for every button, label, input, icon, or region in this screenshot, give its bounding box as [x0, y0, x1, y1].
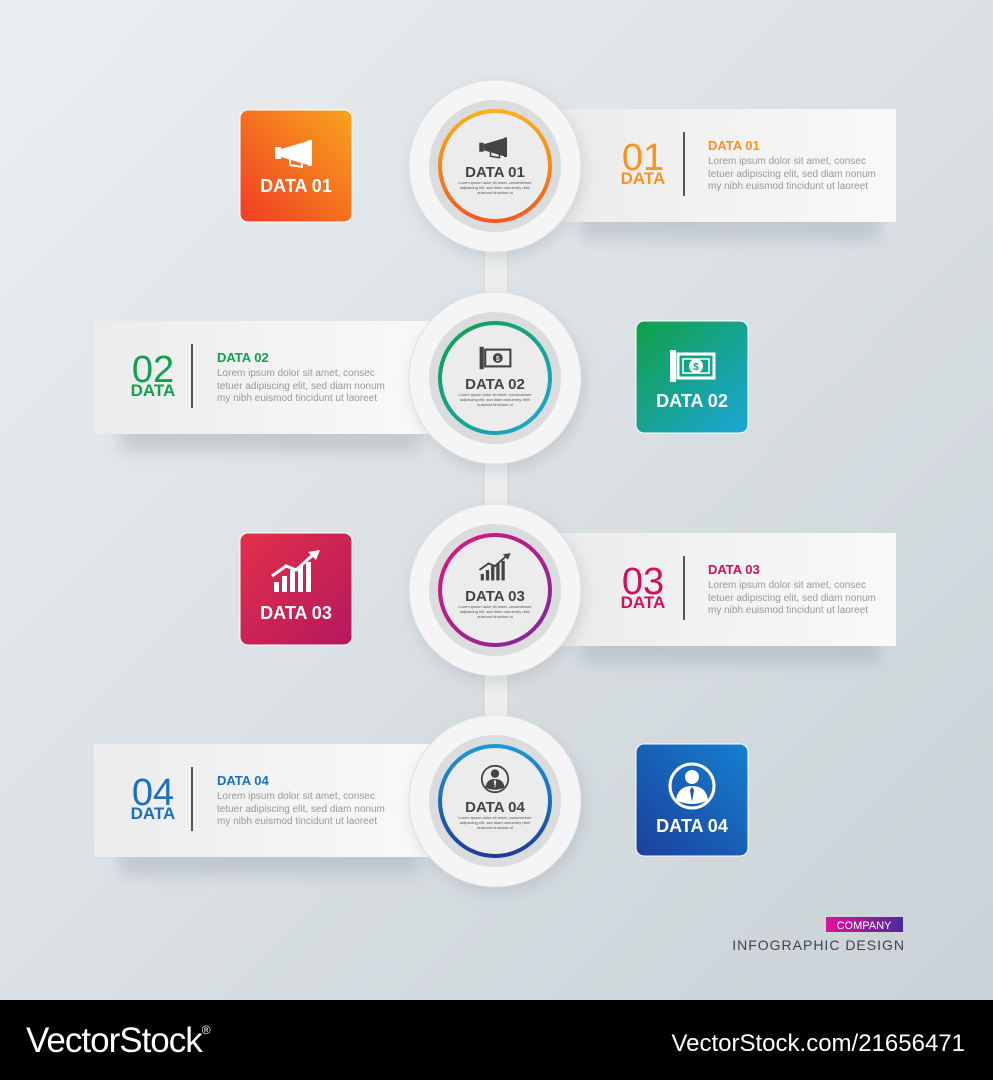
banner 4: tetuer adipiscing elit, sed diam nonum: [217, 804, 385, 815]
square 4: [636, 744, 748, 856]
circle 4: adipiscing elit, sed diam nonummy nibh: [460, 820, 530, 825]
circle 2: $: [496, 356, 500, 363]
banner 3: [560, 533, 896, 664]
square 3: DATA 03: [260, 603, 332, 623]
company label: COMPANY: [837, 920, 892, 932]
row 3: [240, 504, 896, 682]
circle 2: DATA 02: [465, 376, 525, 393]
circle 4: [409, 715, 584, 893]
timeline stem: [484, 166, 508, 806]
banner 3: tetuer adipiscing elit, sed diam nonum: [708, 593, 876, 604]
banner 1: [560, 109, 896, 240]
banner 4: [94, 744, 430, 875]
circle 4: euismod tincidunt ut: [477, 825, 514, 830]
banner 3: DATA: [621, 593, 665, 612]
square 3: [240, 533, 352, 645]
circle 1: [409, 80, 584, 258]
circle 3: [409, 504, 584, 682]
footer watermark bar: ®: [202, 1023, 211, 1037]
banner 2: Lorem ipsum dolor sit amet, consec: [217, 368, 375, 379]
circle 2: [409, 292, 584, 470]
banner 2: DATA: [131, 381, 175, 400]
banner 2: [94, 321, 430, 452]
banner 1: DATA 01: [708, 138, 760, 153]
square 4: DATA 04: [656, 816, 728, 836]
banner 1: 01: [622, 137, 664, 179]
banner 2: my nibh euismod tincidunt ut laoreet: [217, 393, 377, 404]
row 1: [240, 80, 896, 258]
row 2: [94, 292, 748, 470]
square 2: [636, 321, 748, 433]
banner 3: my nibh euismod tincidunt ut laoreet: [708, 605, 868, 616]
footer watermark bar: VectorStock.com/21656471: [671, 1030, 965, 1057]
square 1: DATA 01: [260, 176, 332, 196]
circle 3: DATA 03: [465, 588, 525, 605]
circle 2: Lorem ipsum dolor sit amet, consectetuer: [458, 392, 532, 397]
circle 2: euismod tincidunt ut: [477, 402, 514, 407]
circle 3: euismod tincidunt ut: [477, 614, 514, 619]
banner 1: tetuer adipiscing elit, sed diam nonum: [708, 169, 876, 180]
banner 2: tetuer adipiscing elit, sed diam nonum: [217, 381, 385, 392]
square 2: DATA 02: [656, 391, 728, 411]
banner 1: my nibh euismod tincidunt ut laoreet: [708, 181, 868, 192]
footer watermark bar: VectorStock: [26, 1021, 202, 1060]
banner 4: Lorem ipsum dolor sit amet, consec: [217, 791, 375, 802]
banner 3: DATA 03: [708, 562, 760, 577]
banner 4: 04: [132, 772, 174, 814]
banner 2: DATA 02: [217, 350, 269, 365]
banner 4: DATA 04: [217, 773, 270, 788]
banner 3: 03: [622, 561, 664, 603]
circle 4: DATA 04: [465, 799, 526, 816]
circle 2: adipiscing elit, sed diam nonummy nibh: [460, 397, 530, 402]
circle 1: Lorem ipsum dolor sit amet, consectetuer: [458, 180, 532, 185]
circle 4: Lorem ipsum dolor sit amet, consectetuer: [458, 815, 532, 820]
row 4: [94, 715, 748, 893]
square 1: [240, 110, 352, 222]
banner 3: Lorem ipsum dolor sit amet, consec: [708, 580, 866, 591]
circle 3: Lorem ipsum dolor sit amet, consectetuer: [458, 604, 532, 609]
company label: [732, 917, 905, 953]
circle 3: adipiscing elit, sed diam nonummy nibh: [460, 609, 530, 614]
banner 1: Lorem ipsum dolor sit amet, consec: [708, 156, 866, 167]
circle 1: adipiscing elit, sed diam nonummy nibh: [460, 185, 530, 190]
circle 1: euismod tincidunt ut: [477, 190, 514, 195]
banner 4: my nibh euismod tincidunt ut laoreet: [217, 816, 377, 827]
square 2: $: [693, 362, 699, 373]
footer watermark bar: [0, 1000, 993, 1080]
banner 4: DATA: [131, 804, 175, 823]
banner 2: 02: [132, 349, 174, 391]
circle 1: DATA 01: [465, 164, 525, 181]
company label: INFOGRAPHIC DESIGN: [732, 937, 905, 953]
banner 1: DATA: [621, 169, 665, 188]
